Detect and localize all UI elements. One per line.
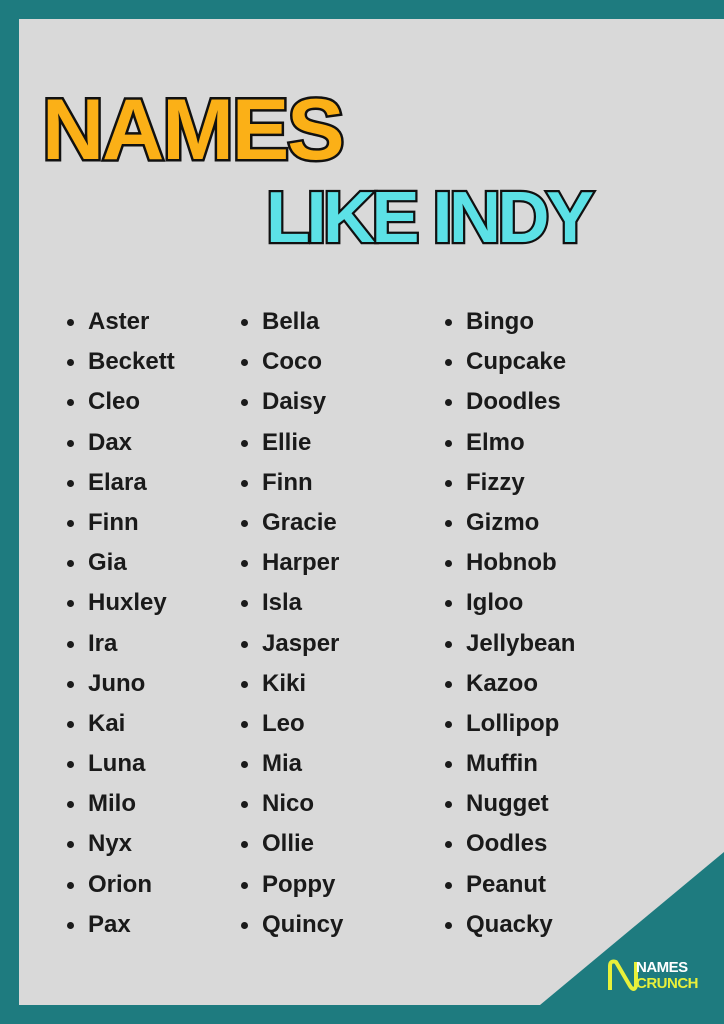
list column 2: Gracie — [262, 509, 337, 536]
list column 1: Milo — [88, 790, 136, 817]
list column 1: Gia — [88, 549, 127, 576]
list column 1: Dax — [88, 429, 132, 456]
list column 2: Quincy — [262, 911, 343, 938]
list column 1 — [67, 308, 175, 938]
list column 3: Cupcake — [466, 348, 566, 375]
list column 2: Bella — [262, 308, 319, 335]
list column 3: Fizzy — [466, 469, 525, 496]
logo: Names Crunch — [608, 959, 698, 992]
list column 3: Jellybean — [466, 630, 575, 656]
list column 2: Daisy — [262, 388, 326, 415]
list column 3: Bingo — [466, 308, 534, 335]
list column 3: Elmo — [466, 429, 525, 456]
list column 2 — [241, 308, 344, 938]
list column 1: Elara — [88, 469, 147, 496]
list column 1: Huxley — [88, 589, 167, 616]
list column 1: Finn — [88, 509, 139, 536]
logo text — [636, 959, 698, 992]
list column 2: Leo — [262, 710, 305, 737]
list column 2: Ellie — [262, 429, 311, 456]
list column 1: Juno — [88, 670, 145, 697]
list column 2: Kiki — [262, 670, 306, 697]
list column 3: Kazoo — [466, 670, 538, 697]
list column 3: Peanut — [466, 871, 546, 898]
list column 3 — [445, 308, 575, 938]
logo text: NAMES — [636, 959, 688, 976]
list column 2: Finn — [262, 469, 313, 496]
list column 1: Kai — [88, 710, 125, 737]
list column 2: Harper — [262, 549, 339, 576]
list column 1: Orion — [88, 871, 152, 898]
list column 3: Gizmo — [466, 509, 539, 536]
list column 3: Muffin — [466, 750, 538, 777]
list column 2: Coco — [262, 348, 322, 375]
list column 3: Hobnob — [466, 549, 557, 576]
list column 3: Lollipop — [466, 710, 559, 737]
list column 2: Nico — [262, 790, 314, 817]
title: NAMES: NAMES — [42, 82, 343, 178]
list column 1: Luna — [88, 750, 145, 777]
list column 1: Nyx — [88, 830, 132, 857]
list column 2: Isla — [262, 589, 302, 616]
list column 1: Cleo — [88, 388, 140, 415]
icon: N mark — [608, 960, 638, 991]
list column 2: Jasper — [262, 630, 339, 656]
list column 2: Poppy — [262, 871, 335, 898]
list column 1: Aster — [88, 308, 149, 335]
list column 1: Ira — [88, 630, 117, 656]
logo text: CRUNCH — [636, 975, 698, 992]
list column 2: Mia — [262, 750, 302, 777]
list column 3: Nugget — [466, 790, 549, 817]
list column 3: Igloo — [466, 589, 523, 616]
list column 3: Quacky — [466, 911, 553, 938]
list column 1: Pax — [88, 911, 131, 938]
list column 2: Ollie — [262, 830, 314, 857]
list column 3: Doodles — [466, 388, 561, 415]
list column 3: Oodles — [466, 830, 547, 857]
title: LIKE INDY: LIKE INDY — [266, 178, 591, 258]
list column 1: Beckett — [88, 348, 175, 375]
